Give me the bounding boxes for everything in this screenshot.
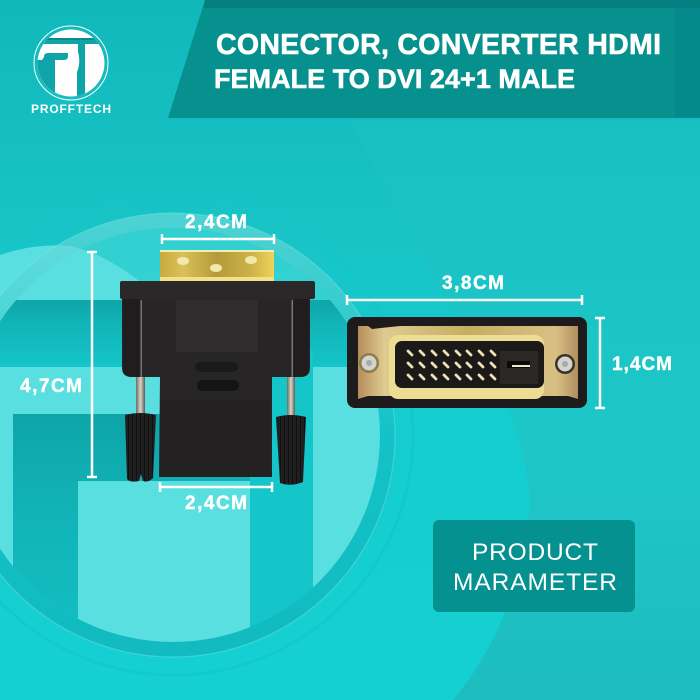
- gold DVI plug: [160, 250, 274, 282]
- connector body: [120, 281, 315, 477]
- right thumbscrew: [276, 377, 306, 485]
- header banner: [168, 0, 700, 118]
- product parameter label: MARAMETER: [453, 569, 617, 596]
- dimension: top width 2,4CM: [162, 212, 274, 244]
- left thumbscrew: [125, 377, 156, 482]
- title: [214, 29, 661, 94]
- dimension: height 4,7CM: [20, 252, 97, 477]
- ground blade slot: [507, 361, 530, 368]
- watermark logo circle: [0, 212, 396, 658]
- dimension: height 1,4CM: [595, 318, 672, 408]
- dimension: width 3,8CM: 3,8CM: [442, 273, 504, 294]
- title: FEMALE TO DVI 24+1 MALE: [214, 64, 575, 94]
- left screw: [359, 353, 379, 373]
- logo: Profftech: [30, 26, 111, 116]
- product: DVI front view: [347, 317, 587, 408]
- title: CONECTOR, CONVERTER HDMI: [216, 29, 661, 61]
- dimension: height 1,4CM: 1,4CM: [612, 354, 672, 375]
- dimension: height 4,7CM: 4,7CM: [20, 376, 82, 397]
- logo: Profftech: PROFFTECH: [31, 102, 111, 116]
- right screw: [555, 354, 575, 374]
- product parameter label: PRODUCT: [472, 539, 598, 566]
- dimension: width 3,8CM: [347, 273, 582, 305]
- product parameter label: [433, 520, 635, 612]
- dimension: top width 2,4CM: 2,4CM: [185, 212, 247, 233]
- DVI pins: [408, 351, 495, 379]
- product: adapter side view: [120, 250, 315, 485]
- dimension: bottom width 2,4CM: 2,4CM: [185, 493, 247, 514]
- dimension: bottom width 2,4CM: [160, 482, 272, 514]
